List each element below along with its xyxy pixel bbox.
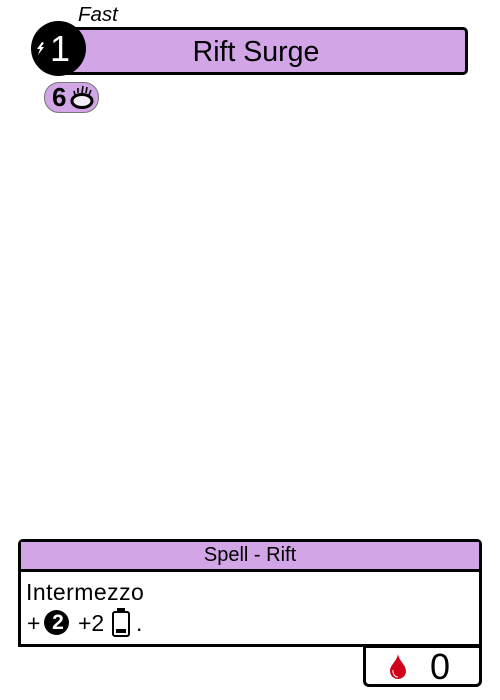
heading: Spell - Rift	[21, 542, 479, 572]
icon: blood drop	[390, 654, 406, 679]
heading: Spell - Rift: Spell - Rift	[204, 544, 296, 566]
badge: 6 with ring icon: 6	[52, 82, 66, 112]
panel: resource cost	[363, 645, 482, 687]
text: plus two cards, plus two energy	[27, 608, 142, 637]
cost circle: 1	[50, 28, 70, 69]
text: plus two cards, plus two energy: .	[136, 610, 142, 636]
icon: battery	[112, 608, 130, 637]
cost circle	[31, 21, 86, 76]
panel: spell text	[18, 539, 482, 647]
badge: 6 with ring icon	[44, 82, 99, 113]
title bar	[60, 27, 468, 75]
text: plus two cards, plus two energy: +2	[78, 610, 104, 636]
text: Intermezzo: Intermezzo	[26, 579, 144, 605]
icon: flaming ring	[70, 86, 94, 109]
text: 0: 0	[430, 646, 450, 687]
label: Fast: Fast	[78, 3, 118, 26]
icon: fast cost 2	[44, 610, 69, 635]
title bar: Rift Surge	[193, 36, 319, 68]
icon: fast cost 2: 2	[52, 611, 64, 634]
text: plus two cards, plus two energy: +	[27, 610, 40, 636]
